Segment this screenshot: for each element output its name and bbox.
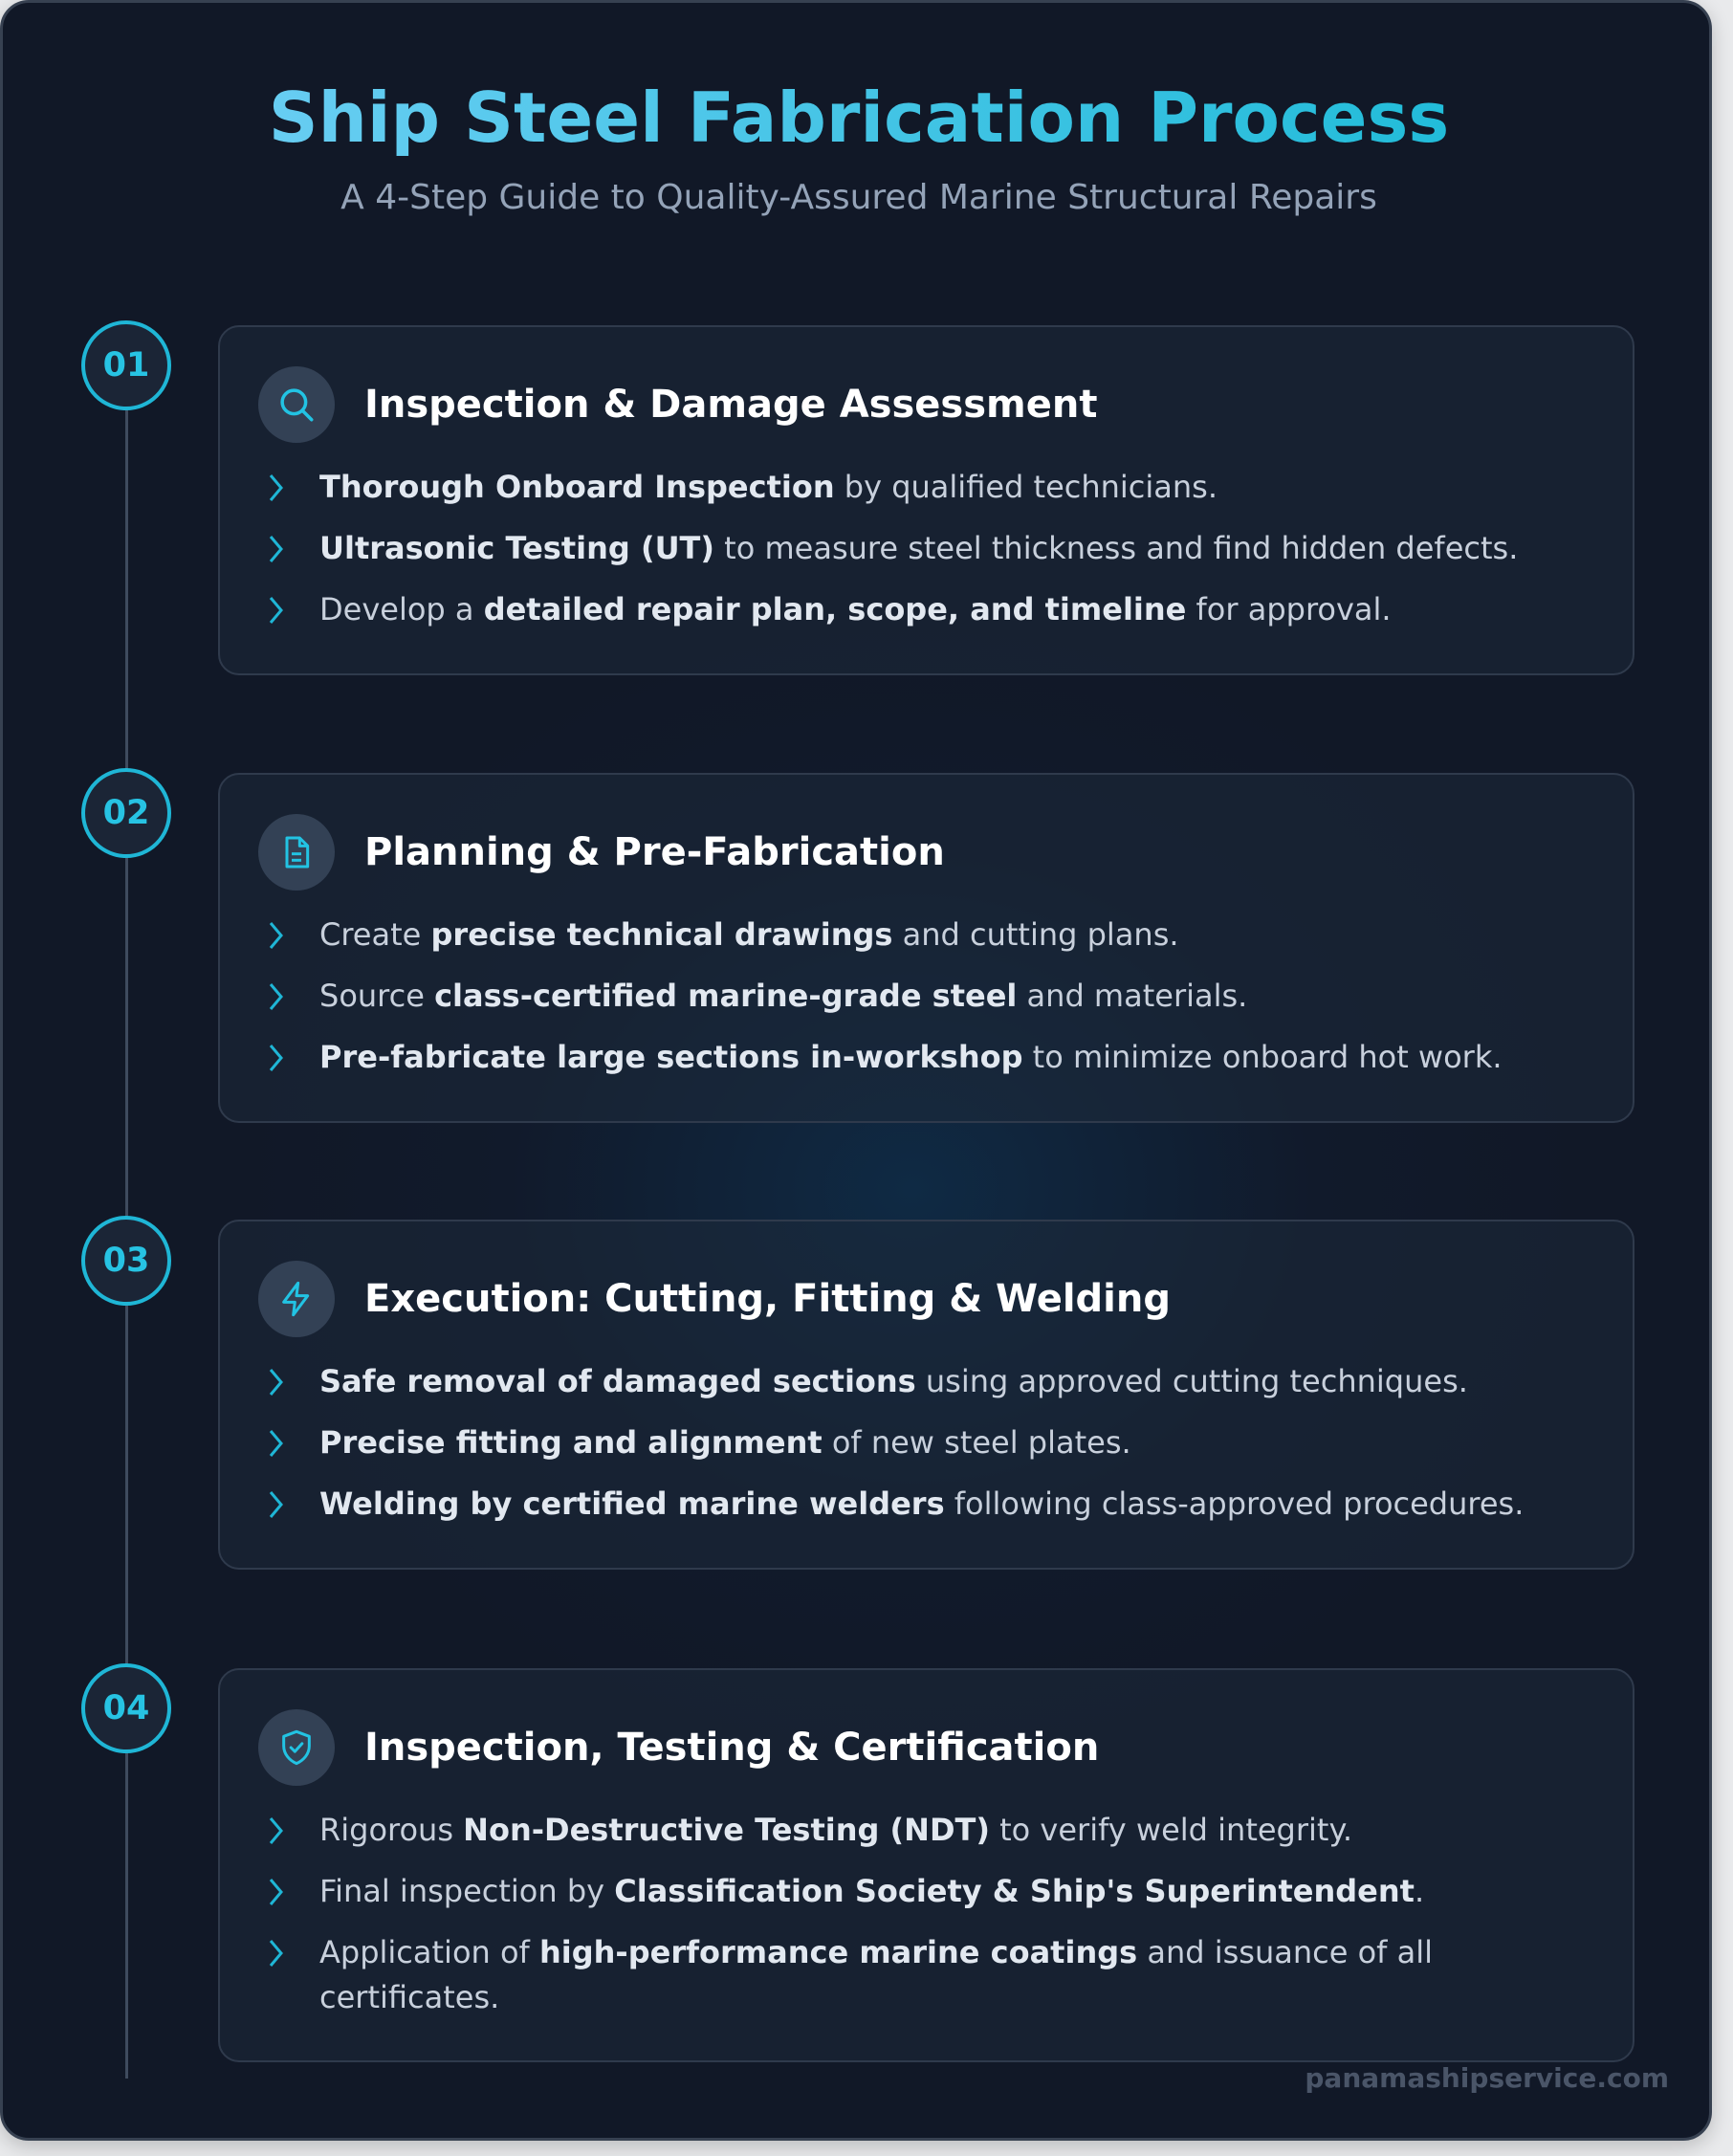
heading: Planning & Pre-Fabrication bbox=[364, 830, 945, 874]
panel: step 4 bbox=[218, 1668, 1634, 2062]
bullet list bbox=[270, 469, 1518, 627]
bullet list: Create precise technical drawings and cutting plans. bbox=[319, 916, 1179, 953]
step number 02 bbox=[81, 768, 171, 858]
bullet list bbox=[270, 1363, 1524, 1522]
panel: step 1 bbox=[218, 325, 1634, 675]
heading: Inspection & Damage Assessment bbox=[364, 383, 1097, 427]
step number 03: 03 bbox=[103, 1242, 149, 1280]
bullet list: Pre-fabricate large sections in-workshop to minimize onboard hot work. bbox=[319, 1039, 1503, 1075]
step number 03 bbox=[81, 1216, 171, 1306]
bullet list: Source class-certified marine-grade steel and materials. bbox=[319, 978, 1247, 1014]
subtitle: A 4-Step Guide to Quality-Assured Marine Structural Repairs bbox=[340, 178, 1377, 217]
panel: step 3 bbox=[218, 1220, 1634, 1570]
panel: step 2 bbox=[218, 773, 1634, 1123]
bullet list: Safe removal of damaged sections using approved cutting techniques. bbox=[319, 1363, 1468, 1399]
bullet list: Ultrasonic Testing (UT) to measure steel thickness and find hidden defects. bbox=[319, 530, 1518, 566]
bullet list: Precise fitting and alignment of new steel plates. bbox=[319, 1424, 1131, 1461]
step number 04: 04 bbox=[103, 1689, 149, 1727]
icon: lightning bbox=[258, 1261, 335, 1337]
bullet list: Develop a detailed repair plan, scope, and timeline for approval. bbox=[319, 591, 1392, 627]
step number 04 bbox=[81, 1663, 171, 1753]
heading: Execution: Cutting, Fitting & Welding bbox=[364, 1277, 1171, 1321]
icon: magnifier bbox=[258, 366, 335, 443]
icon: shield check bbox=[258, 1709, 335, 1786]
step number 01: 01 bbox=[103, 346, 149, 385]
step number 02: 02 bbox=[103, 794, 149, 832]
bullet list bbox=[270, 1812, 1433, 2015]
bullet list: Final inspection by Classification Society & Ship's Superintendent. bbox=[319, 1873, 1424, 1909]
timeline line bbox=[125, 366, 128, 2079]
watermark: panamashipservice.com bbox=[1305, 2062, 1669, 2094]
heading: Inspection, Testing & Certification bbox=[364, 1726, 1099, 1770]
bullet list: Thorough Onboard Inspection by qualified technicians. bbox=[319, 469, 1217, 505]
bullet list: Rigorous Non-Destructive Testing (NDT) to verify weld integrity. bbox=[319, 1812, 1352, 1848]
step number 01 bbox=[81, 320, 171, 410]
bullet list: Welding by certified marine welders following class-approved procedures. bbox=[319, 1485, 1524, 1522]
bullet list: Application of high-performance marine coatings and issuance of all certificates. bbox=[319, 1934, 1433, 2015]
bullet list bbox=[270, 916, 1503, 1075]
title: Ship Steel Fabrication Process bbox=[269, 77, 1449, 158]
icon: document bbox=[258, 814, 335, 891]
